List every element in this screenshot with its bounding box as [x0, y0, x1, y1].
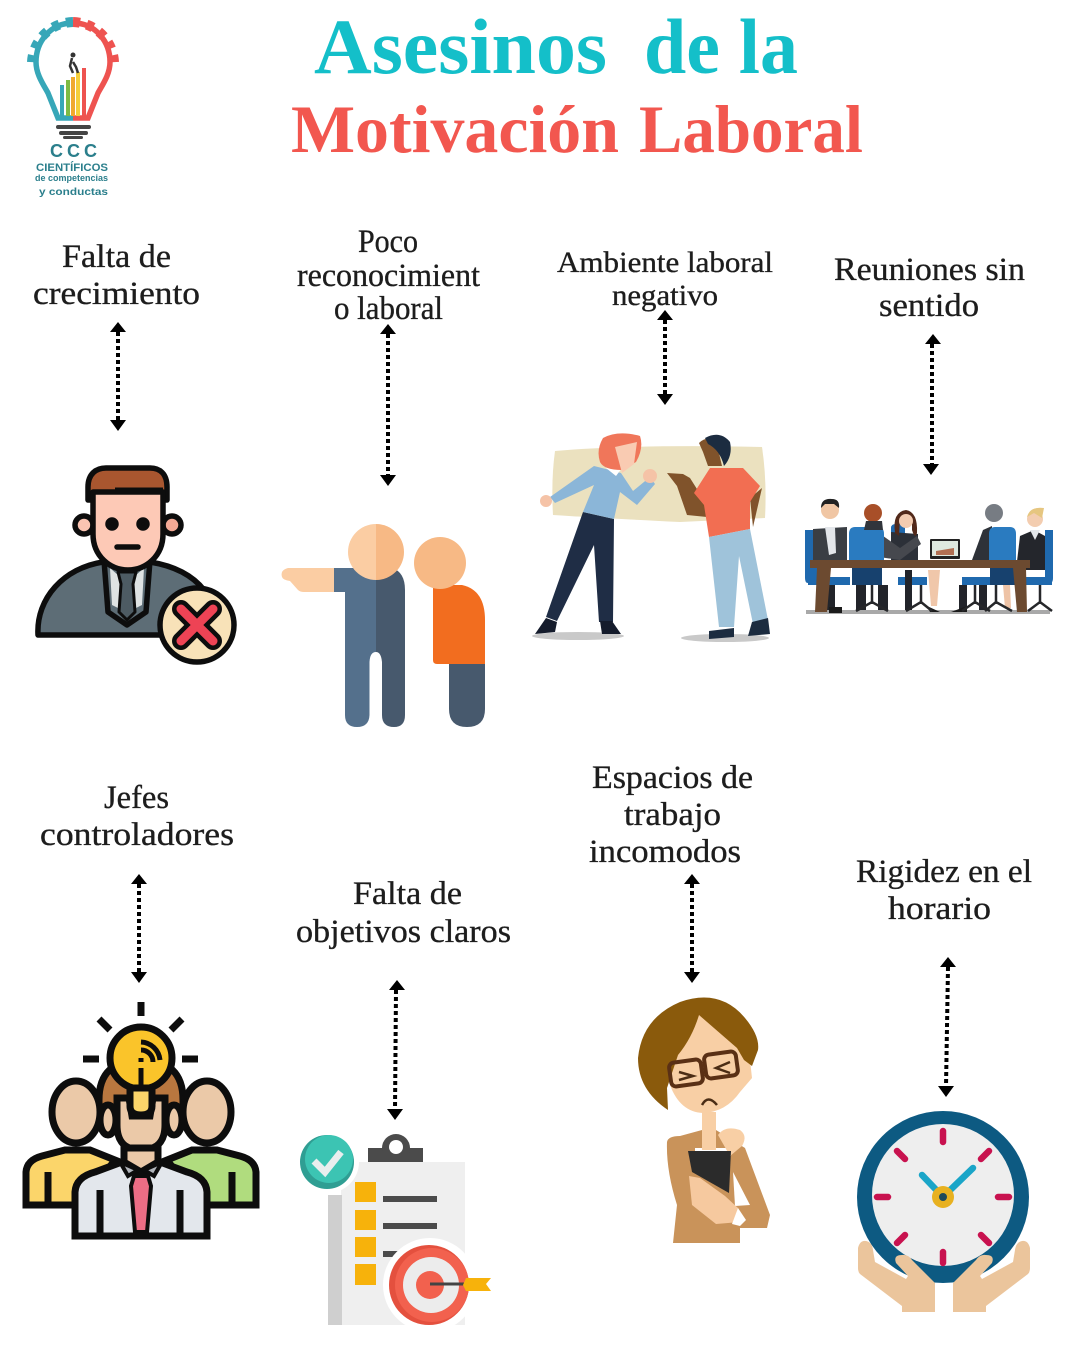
heading: Reuniones sin sentido	[834, 252, 1025, 324]
arrow	[131, 874, 147, 983]
heading: Falta de crecimiento	[33, 239, 200, 312]
panel: Ambiente laboral negativo	[532, 246, 773, 642]
arrow	[110, 322, 126, 431]
logo: CCC lightbulb	[32, 22, 114, 198]
panel: Espacios de trabajo incomodos	[589, 760, 770, 1243]
heading: Falta de crecimiento: crecimiento	[33, 276, 200, 312]
panel: Reuniones sin sentido	[805, 252, 1053, 614]
heading: Espacios de trabajo incomodos: trabajo	[624, 797, 721, 833]
icon: clipboard, check and target	[297, 1131, 491, 1332]
heading: Falta de crecimiento: Falta de	[62, 239, 171, 275]
panel: Falta de crecimiento	[33, 239, 234, 662]
title: Motivación	[291, 91, 619, 167]
arrow	[938, 957, 956, 1097]
arrow	[387, 980, 405, 1120]
heading: Reuniones sin sentido: sentido	[879, 288, 979, 324]
logo: CCC lightbulb: de competencias	[35, 173, 108, 184]
arrow	[380, 324, 396, 486]
heading: Falta de objetivos claros: Falta de	[353, 876, 462, 912]
illustration: business meeting table	[805, 499, 1053, 614]
heading: Poco reconocimiento laboral	[297, 224, 480, 327]
panel: Falta de objetivos claros	[296, 876, 511, 1332]
arrow	[923, 334, 941, 475]
heading: Reuniones sin sentido: Reuniones sin	[834, 252, 1025, 288]
arrow	[684, 874, 700, 983]
arrow	[657, 310, 673, 405]
heading: Rigidez en el horario: Rigidez en el	[856, 854, 1032, 890]
panel: Rigidez en el horario	[856, 854, 1032, 1312]
heading: Falta de objetivos claros: objetivos claros	[296, 914, 511, 950]
title	[291, 3, 863, 167]
heading: Ambiente laboral negativo: Ambiente laboral	[557, 246, 773, 279]
heading: Espacios de trabajo incomodos: incomodos	[589, 834, 741, 870]
heading: Jefes controladores: Jefes	[104, 780, 169, 816]
icon: team with lightbulb	[26, 1002, 256, 1236]
panel: Jefes controladores	[26, 780, 256, 1236]
panel: Poco reconocimiento laboral	[282, 224, 485, 727]
heading: Ambiente laboral negativo	[557, 246, 773, 312]
heading: Poco reconocimiento laboral: Poco	[358, 224, 418, 260]
logo: CCC lightbulb: y conductas	[39, 186, 108, 198]
heading: Falta de objetivos claros	[296, 876, 511, 950]
heading: Rigidez en el horario: horario	[888, 891, 991, 927]
heading: Espacios de trabajo incomodos	[589, 760, 753, 870]
icon: boss pointing at employee	[282, 524, 485, 727]
heading: Jefes controladores: controladores	[40, 817, 234, 853]
heading: Poco reconocimiento laboral: reconocimient	[297, 258, 480, 294]
icon: clock held by two hands	[857, 1111, 1030, 1312]
heading: Poco reconocimiento laboral: o laboral	[334, 291, 443, 327]
title: Laboral	[639, 91, 863, 167]
heading: Ambiente laboral negativo: negativo	[612, 279, 718, 312]
icon: man with red cross badge	[38, 468, 234, 662]
illustration: worried woman with phone	[638, 998, 770, 1243]
heading: Rigidez en el horario	[856, 854, 1032, 927]
title: Asesinos	[314, 3, 607, 90]
heading: Espacios de trabajo incomodos: Espacios de	[592, 760, 753, 796]
logo: CCC lightbulb: C C C	[50, 141, 97, 161]
title: de la	[644, 3, 798, 90]
heading: Jefes controladores	[40, 780, 234, 853]
illustration: two coworkers arguing	[532, 433, 770, 642]
logo: CCC lightbulb: CIENTÍFICOS	[36, 161, 108, 174]
